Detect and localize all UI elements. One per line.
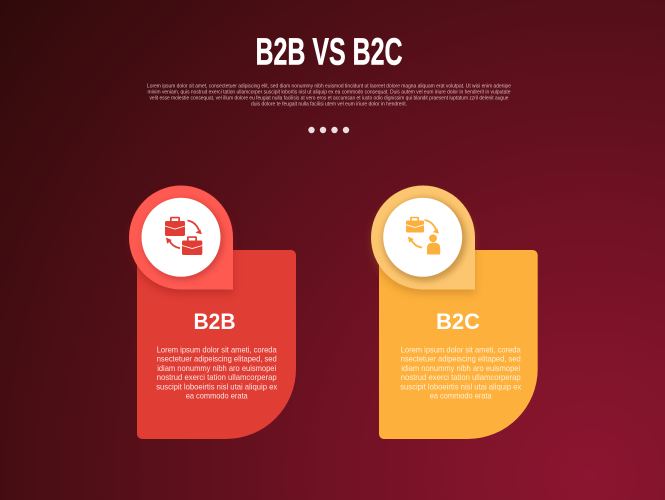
B2C inner shadow (382, 198, 466, 282)
intro text block: minim veniam, quis nostrud exerci tation ullamcorper suscipit lobortis nisl ut aliquip ex ea commodo consequat. Duis autem vel eum iriure dolor in hendrerit in vulputate (148, 90, 511, 96)
B2C body text: Lorem ipsum dolor sit ameti, coreda (401, 344, 521, 354)
B2C white circle (383, 198, 462, 277)
B2C body text: nsectetuer adipeiscing elitaped, sed (401, 354, 521, 364)
B2B body text: nostrud exerci tation ullamcorperap (157, 372, 277, 382)
B2C body text: suscipit loboeirtis nisl utai aliquip ex (400, 381, 522, 391)
B2B body text: idiam nonummy nibh aro euismopei (157, 363, 276, 373)
B2C card (379, 250, 538, 439)
title: B2B VS B2C (256, 32, 402, 74)
panel: B2B (129, 186, 296, 439)
B2C pin shadow (371, 190, 475, 294)
B2B pin shadow (129, 190, 233, 294)
B2B body text (156, 344, 278, 401)
B2B white circle (142, 198, 220, 277)
pagination dots (308, 127, 349, 133)
B2B pin (129, 186, 233, 290)
icon: briefcase and person exchange (406, 217, 440, 254)
B2B body text: ea commodo erata (186, 391, 248, 401)
B2C heading: B2C (436, 309, 480, 334)
icon: briefcase exchange (165, 217, 202, 255)
intro text block: Lorem ipsum dolor sit amet, consectetuer adipiscing elit, sed diam nonummy nibh euismod tincidunt ut laoreet dolore magna aliquam erat volutpat. Ut wisi enim adenipe (147, 84, 511, 90)
B2B heading: B2B (194, 309, 236, 334)
B2C body text (400, 344, 522, 401)
intro text block: duis dolore te feugait nulla facilisi utem vel eum iriure dolor in hendrerit. (251, 101, 407, 107)
B2B inner shadow (142, 198, 224, 280)
panel: B2C (371, 186, 538, 439)
B2B body text: suscipit loboeirtis nisl utai aliquip ex (156, 381, 278, 391)
intro text block (147, 84, 511, 107)
B2B card (137, 250, 296, 439)
B2C body text: ea commodo erata (430, 391, 492, 401)
B2C pin (371, 186, 475, 290)
B2B body text: Lorem ipsum dolor sit ameti, coreda (157, 344, 277, 354)
B2C body text: idiam nonummy nibh aro euismopei (401, 363, 520, 373)
B2B body text: nsectetuer adipeiscing elitaped, sed (157, 354, 277, 364)
B2C body text: nostrud exerci tation ullamcorperap (401, 372, 521, 382)
intro text block: velit esse molestie consequat, vel illum dolore eu feugiat nulla facilisis at vero eros et accumsan et iusto odio dignissim qui blandit praesent luptatum zzril delenit augue (150, 96, 509, 102)
